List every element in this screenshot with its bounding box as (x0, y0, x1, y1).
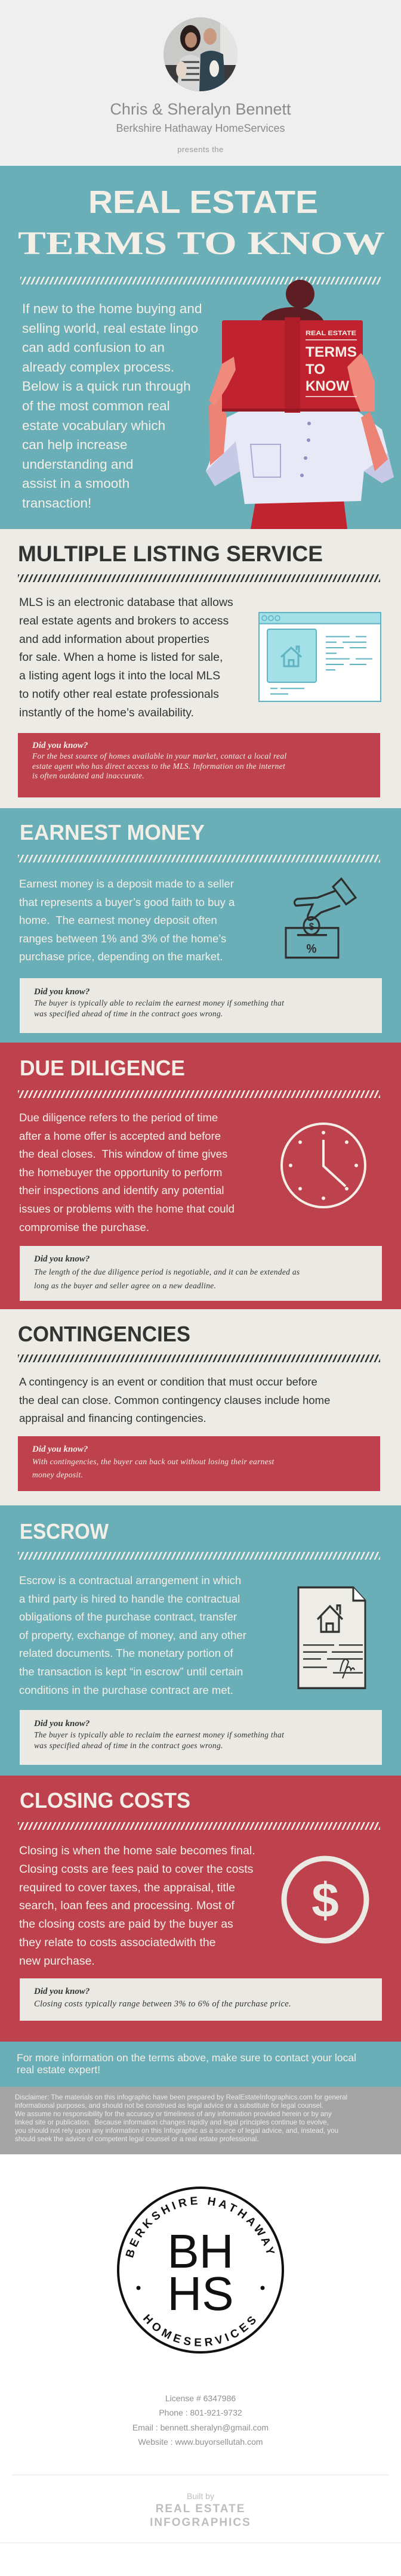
body text (19, 1574, 246, 1696)
callout: did you know (20, 1710, 382, 1765)
body text: for sale. When a home is listed for sale, (19, 651, 223, 664)
hero panel (0, 166, 401, 529)
callout: did you know: is often outdated and inaccurate. (32, 771, 144, 780)
disclaimer (0, 2087, 401, 2154)
contact details: Email : bennett.sheralyn@gmail.com (132, 2423, 269, 2432)
panel: due diligence (0, 1043, 401, 1309)
callout: did you know: The buyer is typically able to reclaim the earnest money if something that (34, 998, 284, 1007)
body text (19, 1375, 330, 1424)
body text: Due diligence refers to the period of time (19, 1111, 218, 1124)
icon: hand depositing coin: % (307, 942, 316, 956)
callout: did you know: The length of the due diligence period is negotiable, and it can be extended as (34, 1267, 300, 1276)
icon: dollar coin: $ (311, 1873, 339, 1928)
panel: closing costs (0, 1776, 401, 2042)
shirt (206, 412, 394, 504)
body text: Closing costs are fees paid to cover the costs (19, 1863, 253, 1876)
callout: did you know (18, 1436, 380, 1491)
callout: did you know: Did you know? (34, 1254, 90, 1264)
body text: home. The earnest money deposit often (19, 914, 217, 926)
header: agent intro (0, 0, 401, 166)
body text: Earnest money is a deposit made to a seller (19, 877, 234, 890)
body text: a listing agent logs it into the local MLS (19, 669, 220, 682)
body text: conditions in the purchase contract are met. (19, 1684, 233, 1696)
intro text: understanding and (22, 457, 133, 472)
body text: purchase price, depending on the market. (19, 950, 223, 963)
callout: did you know: The buyer is typically able to reclaim the earnest money if something that (34, 1730, 284, 1739)
disclaimer: informational purposes, and should not be construed as legal advice or a substitute for legal counsel. (15, 2102, 323, 2110)
book (222, 320, 363, 412)
body text: MLS is an electronic database that allows (19, 596, 233, 609)
agent name: Chris & Sheralyn Bennett (110, 100, 291, 118)
credit: built by real estate infographics: Built by (187, 2491, 214, 2501)
disclaimer: Disclaimer: The materials on this infographic have been prepared by RealEstateInfographics.com for general (15, 2093, 347, 2101)
contact details: License # 6347986 (165, 2393, 236, 2403)
intro text: estate vocabulary which (22, 418, 165, 433)
body text: a third party is hired to handle the contractual (19, 1592, 240, 1605)
logo: berkshire hathaway homeservices: BERKSHIRE HATHAWAY (125, 2197, 274, 2258)
logo: berkshire hathaway homeservices: BH (167, 2225, 234, 2278)
callout: did you know: With contingencies, the buyer can back out without losing their earnest (32, 1457, 274, 1466)
icon: hand depositing coin (285, 877, 357, 959)
credit: built by real estate infographics (150, 2491, 251, 2529)
intro text: assist in a smooth (22, 476, 129, 491)
callout: did you know: Did you know? (34, 1987, 90, 1996)
callout: did you know: was specified ahead of time in the contract goes wrong. (34, 1009, 223, 1018)
body text: Escrow is a contractual arrangement in which (19, 1574, 241, 1587)
illustration: woman reading book (206, 280, 394, 529)
presents: presents the (177, 145, 224, 154)
body text: appraisal and financing contingencies. (19, 1412, 206, 1424)
hair (286, 280, 314, 308)
intro text (22, 301, 202, 511)
body text: the transaction is kept “in escrow” until certain (19, 1665, 243, 1678)
body text: after a home offer is accepted and before (19, 1130, 221, 1142)
icon: clock (280, 1122, 366, 1208)
body text: real estate agents and brokers to access (19, 614, 229, 627)
illustration: woman reading book: TO (306, 361, 325, 378)
contact details (132, 2393, 269, 2447)
body text: obligations of the purchase contract, transfer (19, 1610, 237, 1623)
contact details: Website : www.buyorsellutah.com (138, 2437, 263, 2447)
body text: compromise the purchase. (19, 1221, 149, 1233)
body text: the deal can close. Common contingency clauses include home (19, 1394, 330, 1406)
body text (19, 596, 233, 719)
callout: did you know: was specified ahead of time in the contract goes wrong. (34, 1741, 223, 1750)
body text (19, 1844, 255, 1968)
title: TERMS TO KNOW (18, 225, 385, 261)
panel: contingencies (0, 1309, 401, 1505)
body text (19, 877, 235, 963)
callout: did you know (20, 1246, 382, 1301)
heading: EARNEST MONEY (20, 820, 205, 844)
hands (209, 357, 236, 406)
call to action: For more information on the terms above, make sure to contact your local (17, 2052, 356, 2064)
body text: related documents. The monetary portion of (19, 1647, 233, 1659)
icon: contract document (297, 1587, 366, 1689)
body text: search, loan fees and processing. Most of (19, 1899, 235, 1912)
callout: did you know (18, 733, 380, 797)
contact details: Phone : 801-921-9732 (159, 2408, 242, 2417)
icon: dollar coin (282, 1856, 369, 1943)
body text: that represents a buyer’s good faith to buy a (19, 896, 235, 908)
body text: issues or problems with the home that could (19, 1202, 235, 1215)
agent photo (164, 17, 237, 91)
call to action: real estate expert! (17, 2064, 100, 2076)
intro text: If new to the home buying and (22, 301, 202, 316)
credit: built by real estate infographics: REAL ESTATE (156, 2503, 245, 2515)
body text: new purchase. (19, 1955, 95, 1968)
body text: required to cover taxes, the appraisal, title (19, 1881, 235, 1894)
body text: they relate to costs associatedwith the (19, 1936, 216, 1949)
intro text: already complex process. (22, 360, 174, 375)
logo: berkshire hathaway homeservices (117, 2187, 284, 2354)
disclaimer: linked site or publication. Because information changes rapidly and legal principles continue to evolve, (15, 2119, 329, 2126)
intro text: selling world, real estate lingo (22, 321, 198, 336)
arms (209, 394, 227, 465)
callout: did you know: Closing costs typically range between 3% to 6% of the purchase price. (34, 1999, 291, 2009)
body text: Closing is when the home sale becomes final. (19, 1844, 255, 1857)
book cover text: REAL ESTATE (306, 330, 356, 337)
call to action (0, 2042, 401, 2087)
icon: browser listing (258, 612, 381, 702)
callout: did you know (20, 978, 382, 1033)
title: REAL ESTATE (88, 184, 318, 220)
callout: did you know: Did you know? (32, 1445, 88, 1454)
body text: their inspections and identify any potential (19, 1184, 224, 1196)
intro text: transaction! (22, 496, 91, 511)
callout: did you know (20, 1978, 382, 2021)
callout: did you know: Did you know? (34, 987, 90, 997)
body text: to notify other real estate professionals (19, 688, 219, 701)
brokerage: Berkshire Hathaway HomeServices (116, 122, 285, 134)
body text: and add information about properties (19, 633, 209, 646)
body text: instantly of the home’s availability. (19, 706, 194, 719)
intro text: of the most common real (22, 398, 170, 413)
intro text: can add confusion to an (22, 340, 165, 355)
body text: the homebuyer the opportunity to perform (19, 1166, 222, 1179)
illustration: woman reading book: TERMS (306, 344, 357, 360)
body text: A contingency is an event or condition that must occur before (19, 1375, 317, 1388)
logo: berkshire hathaway homeservices: HS (167, 2267, 234, 2320)
panel: earnest money (0, 808, 401, 1043)
body text: the deal closes. This window of time gives (19, 1148, 227, 1160)
icon: hand depositing coin: $ (309, 921, 314, 932)
disclaimer: We assume no responsibility for the accuracy or timeliness of any information provided herein or by any (15, 2110, 332, 2118)
panel: multiple listing service (0, 529, 401, 808)
credit: built by real estate infographics: INFOGRAPHICS (150, 2516, 251, 2529)
body text: of property, exchange of money, and any other (19, 1629, 246, 1641)
body text: the closing costs are paid by the buyer as (19, 1918, 233, 1931)
body text: ranges between 1% and 3% of the home’s (19, 932, 226, 945)
disclaimer: should seek the advice of competent legal counsel or a real estate professional. (15, 2135, 259, 2143)
intro text: Below is a quick run through (22, 379, 191, 394)
callout: did you know: For the best source of homes available in your market, contact a local real (32, 752, 286, 760)
callout: did you know: Did you know? (32, 741, 88, 750)
callout: did you know: estate agent who has direct access to the MLS. Information on the internet (32, 761, 285, 771)
intro text: can help increase (22, 437, 127, 452)
skirt (251, 495, 347, 529)
disclaimer: you should not rely upon any information on this Infographic as a source of legal advice, and, instead, you (15, 2127, 338, 2135)
title (18, 184, 385, 261)
logo: berkshire hathaway homeservices: HOMESERVICES (143, 2314, 255, 2346)
callout: did you know: long as the buyer and seller agree on a new deadline. (34, 1281, 216, 1290)
body text (19, 1111, 235, 1233)
callout: did you know: Did you know? (34, 1719, 90, 1728)
panel: escrow (0, 1505, 401, 1776)
callout: did you know: money deposit. (32, 1470, 83, 1479)
illustration: woman reading book: KNOW (306, 378, 349, 394)
